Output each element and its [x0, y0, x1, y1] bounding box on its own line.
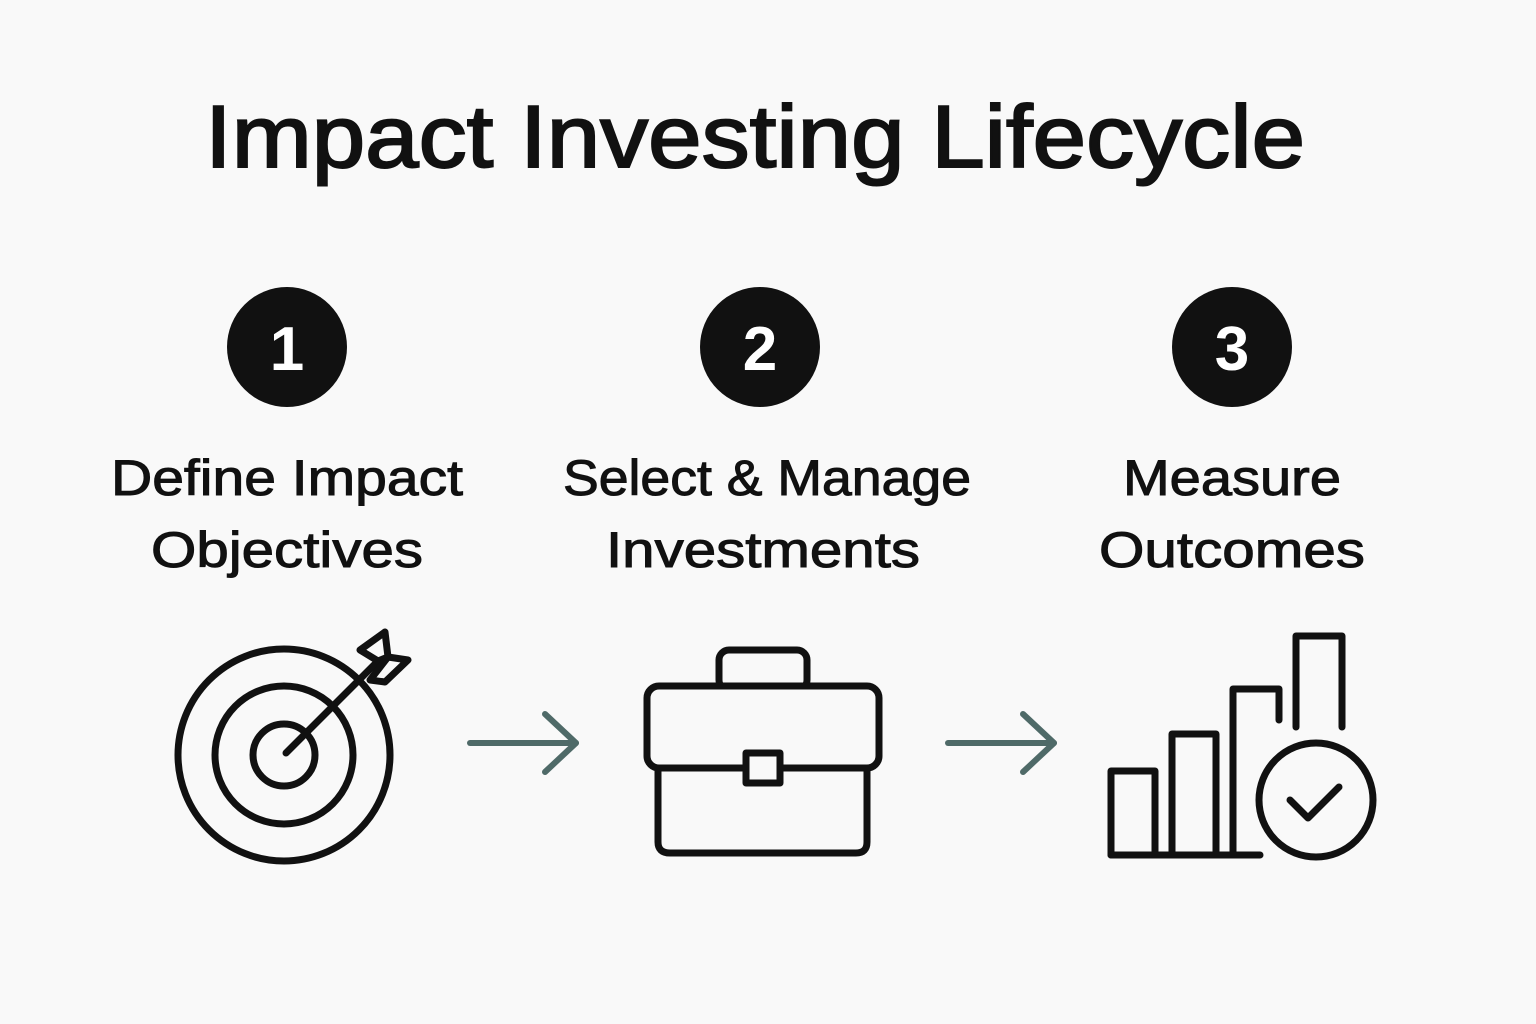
arrow 2 [948, 714, 1054, 772]
badge 1 [227, 287, 347, 407]
badge 2 [700, 287, 820, 407]
label 2: Investments [606, 522, 920, 578]
label 1: Define Impact [111, 450, 463, 506]
label 1 [111, 450, 463, 578]
step 2 [563, 287, 971, 853]
arrow 1 [470, 714, 576, 772]
label 3: Measure [1123, 450, 1341, 506]
label 2 [563, 450, 971, 578]
badge 3 [1172, 287, 1292, 407]
label 2: Select & Manage [563, 450, 971, 506]
step 3 [1099, 287, 1373, 857]
icon: briefcase [647, 650, 879, 853]
label 1: Objectives [151, 522, 423, 578]
label 3: Outcomes [1099, 522, 1365, 578]
step 1 [111, 287, 463, 861]
badge 3: 3 [1215, 315, 1249, 384]
badge 1: 1 [270, 315, 304, 384]
icon: bar chart with check [1111, 636, 1373, 857]
icon: target [178, 632, 408, 861]
badge 2: 2 [743, 315, 777, 384]
label 3 [1099, 450, 1365, 578]
title: Impact Investing Lifecycle [205, 87, 1305, 186]
